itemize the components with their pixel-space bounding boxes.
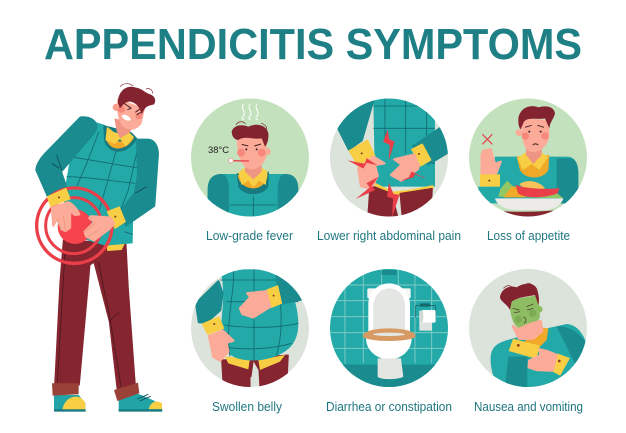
green face (539, 306, 543, 312)
torso (373, 97, 435, 187)
circle background (191, 98, 309, 216)
circle background (469, 98, 587, 216)
heat waves (242, 104, 258, 120)
waistband and trousers (375, 183, 433, 197)
sweater torso (63, 118, 139, 246)
arms (196, 282, 222, 322)
title: APPENDICITIS SYMPTOMS (44, 20, 582, 69)
label: Swollen belly (212, 400, 283, 414)
sweater (208, 174, 298, 220)
label: Diarrhea or constipation (326, 400, 452, 414)
panel: swollen belly (191, 269, 309, 414)
neck and face (526, 148, 542, 164)
label: Lower right abdominal pain (317, 229, 461, 243)
pain spot and rings (37, 188, 112, 263)
right shoe (119, 393, 162, 412)
hands (209, 331, 233, 361)
hair (232, 125, 268, 147)
hands (52, 202, 114, 240)
plate (495, 198, 563, 210)
circle background (191, 269, 309, 387)
collar (103, 125, 137, 152)
label: Low-grade fever (206, 229, 293, 243)
circle background (330, 98, 448, 216)
jacket (491, 324, 587, 390)
cuffs (202, 317, 224, 334)
left shoe (54, 395, 86, 412)
vent (382, 270, 397, 275)
panel: low-grade fever (191, 98, 309, 243)
temperature label: 38°C (208, 145, 229, 156)
food (498, 181, 563, 198)
panel: nausea and vomiting (469, 269, 587, 414)
neck and head (113, 84, 155, 138)
seat (363, 328, 416, 341)
cuffs (349, 140, 375, 167)
near arm (37, 118, 96, 197)
collar (524, 328, 548, 348)
wall tiles (328, 267, 452, 363)
toilet bowl (366, 338, 412, 359)
neck and face (245, 165, 262, 180)
shirt hem (106, 243, 125, 251)
hand and cuff (482, 149, 501, 174)
label: Loss of appetite (487, 229, 570, 243)
circle background (330, 269, 448, 387)
arms (338, 98, 374, 149)
pain bolts (383, 130, 394, 159)
red cross (482, 134, 492, 144)
main figure: man holding abdomen (37, 84, 162, 412)
label: Nausea and vomiting (474, 400, 583, 414)
hair (518, 106, 555, 129)
panel: loss of appetite (469, 98, 587, 243)
thermometer (234, 160, 249, 162)
hair (500, 284, 539, 310)
floor (342, 364, 436, 387)
panel: lower right abdominal pain (317, 97, 461, 243)
circle background (469, 269, 587, 387)
toilet lid (368, 283, 410, 332)
cuffs (47, 188, 125, 228)
trousers (222, 355, 288, 388)
cuffs (509, 339, 539, 358)
belly (220, 269, 298, 360)
tank (367, 288, 411, 298)
hand on chest (529, 349, 557, 371)
sweater (478, 157, 578, 203)
hand on throat (513, 321, 542, 339)
far arm (120, 140, 158, 225)
hands (358, 157, 384, 189)
panel: diarrhea or constipation (326, 267, 452, 414)
trousers (52, 240, 139, 401)
toilet paper (416, 306, 436, 317)
